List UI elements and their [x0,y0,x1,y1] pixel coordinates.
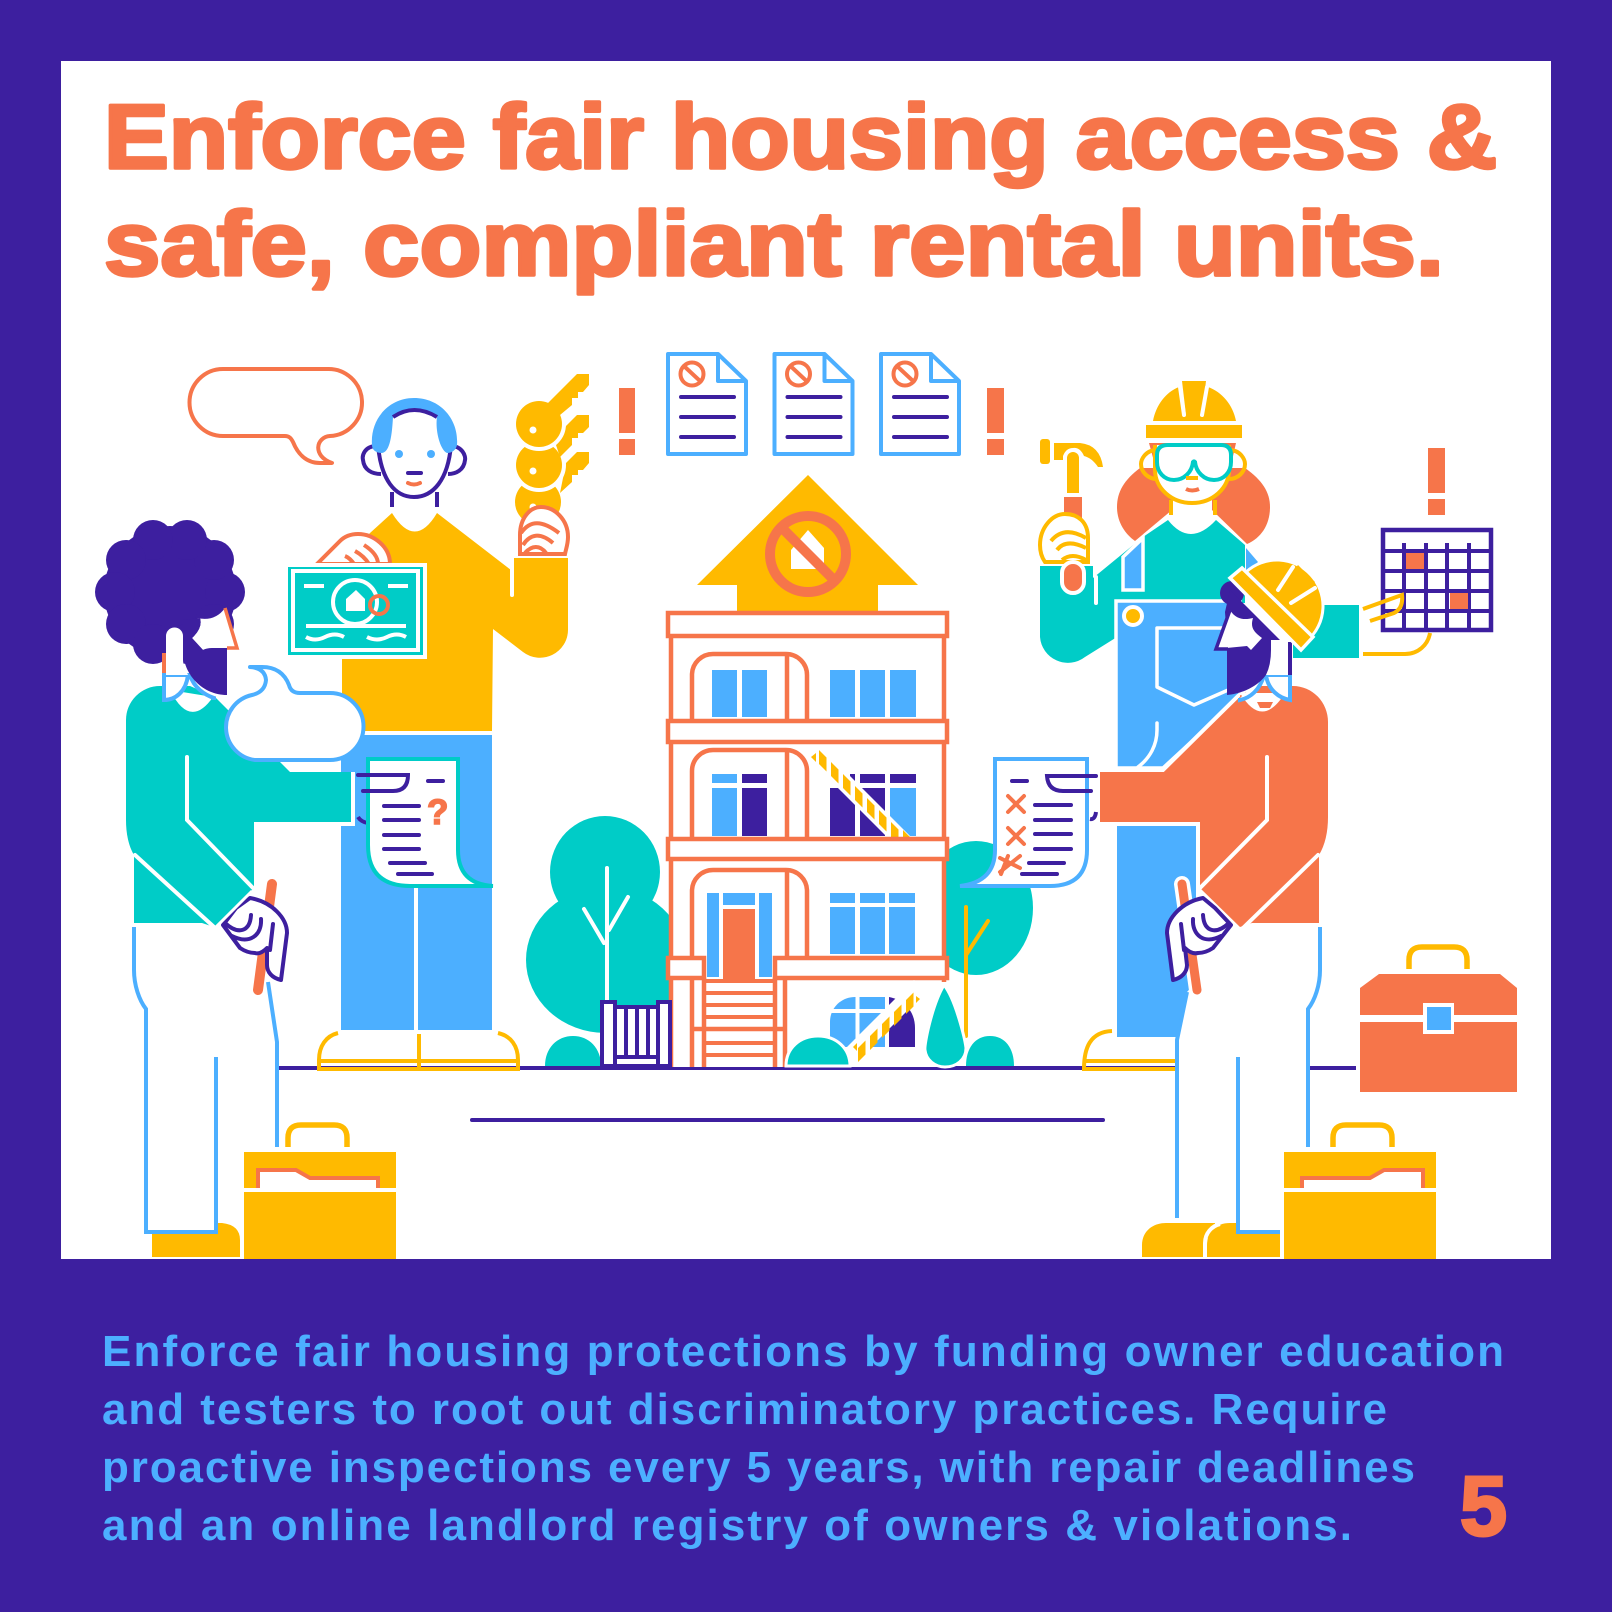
pants [341,735,492,1030]
blue speech bubble [226,667,364,760]
beard [183,618,227,695]
shirt [1040,520,1245,663]
document icons [668,354,959,454]
exclamation marks [619,388,1445,515]
overalls lower [1117,826,1196,1037]
right bearded man [1100,560,1328,1257]
hair [1117,443,1270,544]
shoe [1084,1031,1180,1069]
bushes [545,1036,1014,1066]
warning house arrow [697,475,918,612]
neck [1266,640,1288,675]
document with x marks [960,759,1096,886]
face [192,608,237,650]
hand holding keys [520,507,568,554]
hard hat [1230,560,1323,650]
body text [102,1327,1504,1550]
ground lines [278,1068,1356,1120]
straps [1123,538,1143,590]
left briefcase [244,1125,396,1259]
shirt [126,686,353,927]
body text: Enforce fair housing protections by funding owner education [102,1327,1504,1376]
bill [288,563,427,659]
shoes [319,1033,518,1071]
calendar [1383,530,1491,630]
cypress tree [925,985,966,1067]
speech bubble orange [190,369,362,463]
overalls upper [1116,601,1240,768]
body text: and an online landlord registry of owners & violations. [102,1501,1352,1550]
hand at calendar [1363,595,1430,654]
hard hat [1146,381,1242,438]
body text: and testers to root out discriminatory practices. Require [102,1385,1387,1434]
hair and beard [1220,581,1280,695]
shirt [1100,686,1328,927]
title [104,87,1497,295]
shoes [1142,1223,1280,1257]
head [363,398,465,507]
left bearded man [95,520,353,1257]
document with question mark: ? [427,793,448,832]
pants [134,927,277,1232]
right briefcase [1284,1125,1436,1259]
title: Enforce fair housing access & [104,87,1497,188]
white panel [61,61,1551,1259]
caution tape lower [850,986,920,1062]
right pencil and hand [1167,884,1231,990]
right sleeve [1293,605,1359,658]
left tree [526,816,686,1033]
woman with hard hat [1040,381,1491,1069]
collar [1240,675,1290,712]
collar [164,675,214,712]
neck [166,628,188,675]
hair [95,520,245,664]
door [723,909,755,980]
hammer [1040,439,1103,593]
title: safe, compliant rental units. [104,194,1444,295]
head [1141,445,1245,515]
keys [515,374,589,525]
torso [342,513,568,731]
left pencil and hand [214,884,287,990]
face [1216,610,1262,650]
document 3 [881,354,959,454]
yellow sapling [966,907,988,1036]
shoe [152,1223,240,1257]
right tree [919,841,1033,975]
hand behind bill [317,534,390,564]
document with question mark [358,759,493,886]
document 2 [774,354,852,454]
fence [602,1002,670,1066]
basement windows [830,997,915,1047]
document 1 [668,354,746,454]
bald man [288,374,589,1071]
caution tape upper [809,747,910,843]
windows [707,670,916,977]
front bush [786,1036,850,1066]
page number: 5 [1460,1459,1507,1553]
toolbox [1360,947,1517,1092]
apartment building [668,613,947,1067]
pants [1178,923,1320,1232]
body text: proactive inspections every 5 years, with repair deadlines [102,1443,1415,1492]
